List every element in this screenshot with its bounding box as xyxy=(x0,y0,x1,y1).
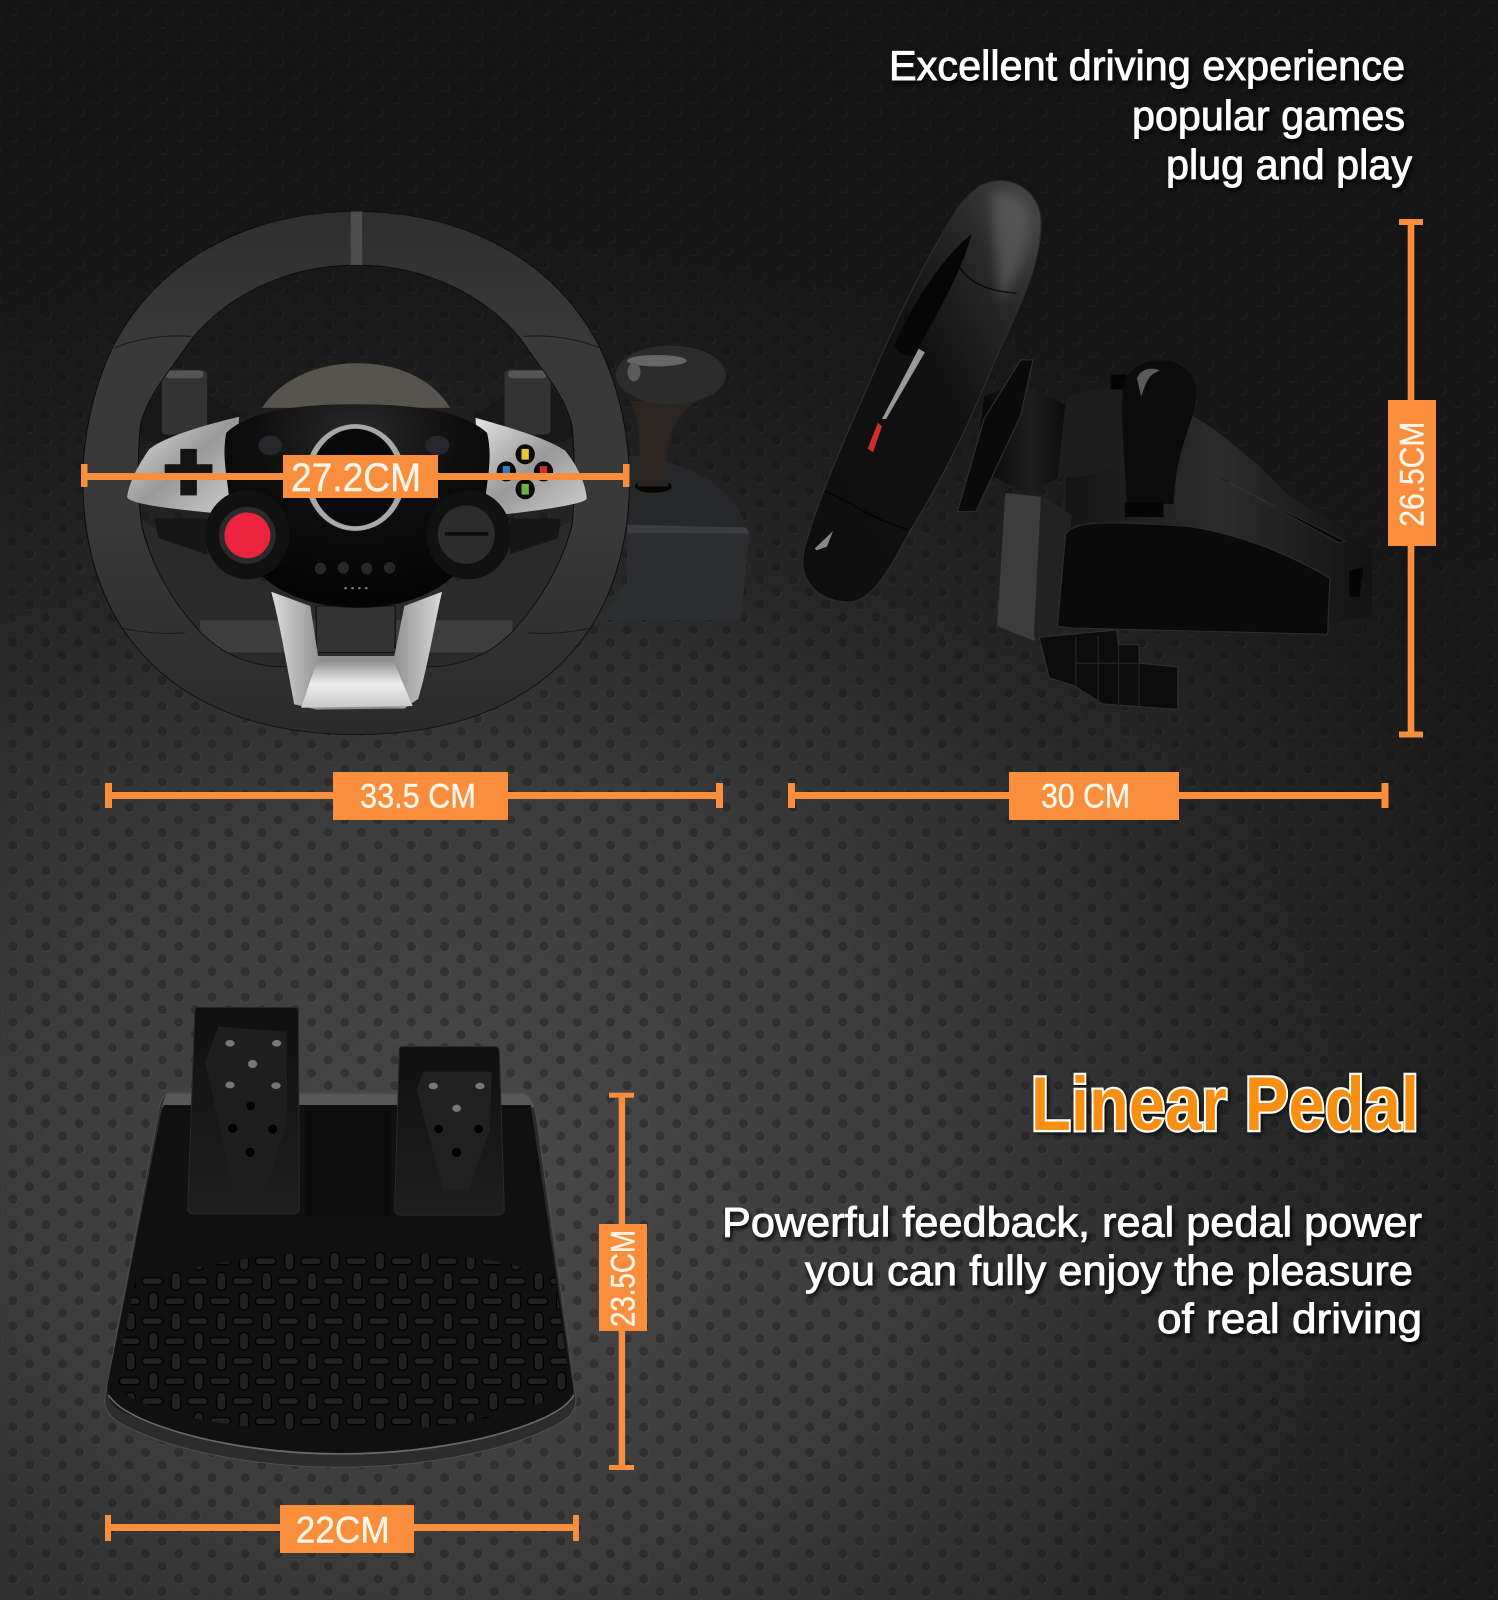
shifter xyxy=(1110,360,1196,517)
ABXY buttons xyxy=(497,444,553,499)
dimension: pedal width 22CM: 22CM xyxy=(296,1510,390,1551)
product: pedal set xyxy=(103,1007,577,1467)
product: steering wheel side view xyxy=(803,181,1372,709)
lower rim trim xyxy=(815,531,833,550)
text block: pedal description: you can fully enjoy the pleasure xyxy=(805,1247,1413,1294)
dimension: wheel diameter 27.2CM: 27.2CM xyxy=(291,456,421,500)
dimension: wheel height 26.5CM xyxy=(1388,219,1436,738)
heading: Linear Pedal: Linear Pedal xyxy=(1031,1062,1419,1147)
top vent lines xyxy=(1204,471,1345,543)
text block: pedal description: of real driving xyxy=(1157,1295,1422,1342)
dimension: wheel diameter 27.2CM xyxy=(81,455,630,500)
center well xyxy=(307,1110,390,1217)
heading: feature text xyxy=(889,42,1412,188)
rear port xyxy=(1349,567,1363,597)
silver lower spoke xyxy=(271,592,442,710)
shifter knob xyxy=(616,346,726,486)
silver sliver xyxy=(882,349,925,419)
silver plates xyxy=(127,417,587,517)
pedal base rim xyxy=(105,1093,576,1467)
grey joystick xyxy=(426,490,511,579)
dimension: pedal depth 23.5CM xyxy=(599,1093,647,1470)
indicator lights xyxy=(344,587,368,589)
red button edge xyxy=(868,423,882,452)
steering shaft xyxy=(957,360,1127,512)
left pedal xyxy=(188,1007,299,1214)
small function buttons xyxy=(314,561,396,575)
dimension: wheel width 33.5 CM xyxy=(105,772,723,820)
wheel rim xyxy=(83,211,629,735)
lower hole panel xyxy=(142,520,572,667)
shifter base xyxy=(597,456,750,620)
paddle frames xyxy=(139,370,573,444)
center logo ring xyxy=(308,426,402,529)
pedal top strip xyxy=(162,1093,534,1107)
front box xyxy=(1057,523,1330,634)
center hub xyxy=(224,404,490,608)
dimension: depth 30 CM: 30 CM xyxy=(1041,778,1130,816)
heading: feature text: popular games xyxy=(1132,92,1405,139)
product: steering wheel front view with shifter xyxy=(83,211,750,735)
d-pad xyxy=(165,449,212,495)
lower hole detail xyxy=(154,519,561,652)
dimension: pedal width 22CM xyxy=(105,1505,579,1553)
wheel rim side xyxy=(803,181,1041,602)
heading: feature text: Excellent driving experience xyxy=(889,42,1405,89)
dimension: pedal depth 23.5CM: 23.5CM xyxy=(604,1230,642,1327)
silver spoke block xyxy=(301,660,413,708)
right pedal xyxy=(395,1047,504,1215)
text block: pedal description: Powerful feedback, real pedal power xyxy=(722,1199,1422,1246)
dimension: depth 30 CM xyxy=(788,772,1388,820)
side plates xyxy=(997,493,1072,641)
table clamp xyxy=(1039,630,1178,709)
dimension: wheel height 26.5CM: 26.5CM xyxy=(1393,422,1431,527)
front edge highlight xyxy=(108,1395,574,1454)
pedal base surface xyxy=(107,1105,573,1454)
dimension: wheel width 33.5 CM: 33.5 CM xyxy=(360,778,476,816)
top hub buttons xyxy=(258,436,449,455)
tread pattern xyxy=(118,1252,567,1431)
red joystick xyxy=(205,490,290,579)
hub dome xyxy=(262,363,450,408)
base rear housing xyxy=(1066,384,1372,624)
text block: pedal description xyxy=(722,1199,1422,1342)
heading: feature text: plug and play xyxy=(1166,141,1412,188)
